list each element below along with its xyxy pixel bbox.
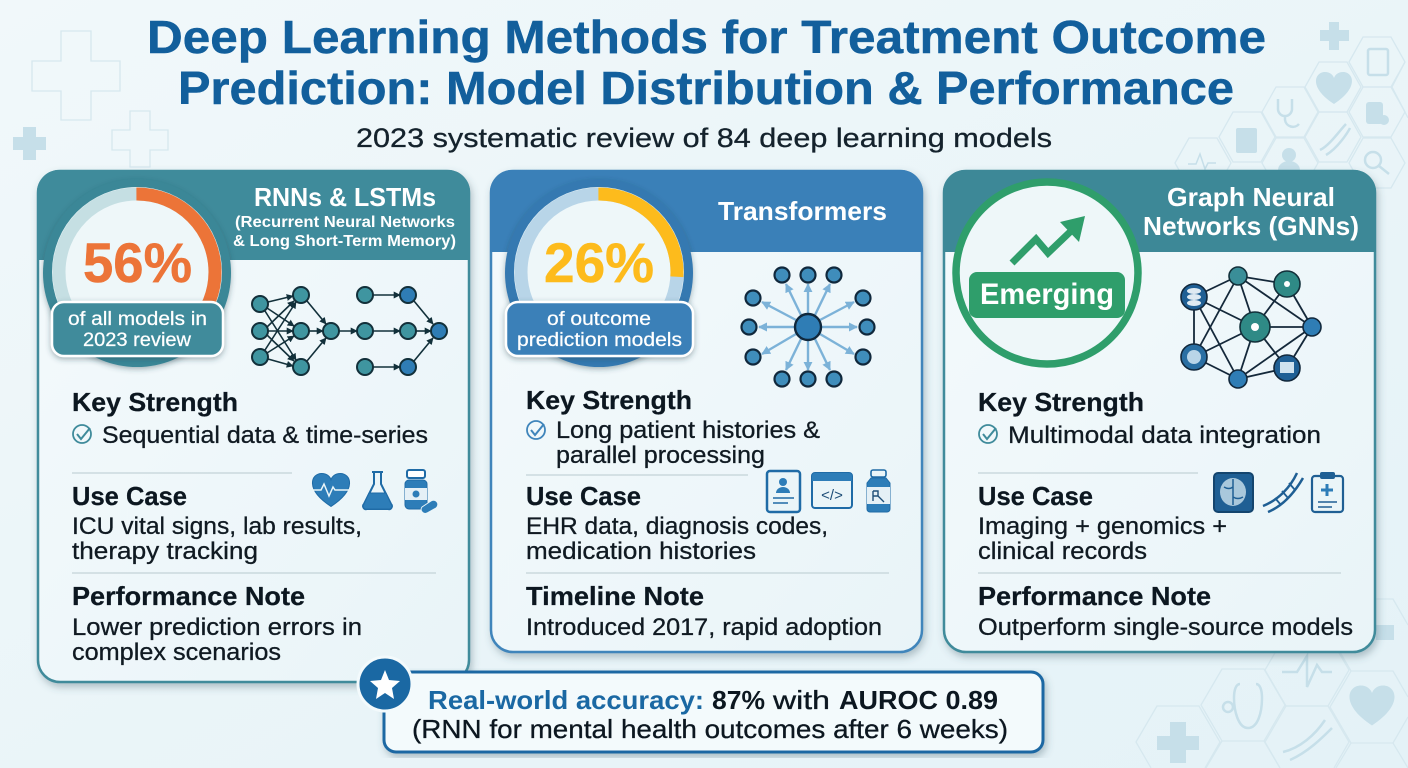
header: RNNs and LSTMs: & Long Short-Term Memory) (233, 233, 456, 250)
key strength (978, 387, 1321, 449)
title: Deep Learning Methods for Treatment Outcome (147, 11, 1266, 63)
performance note (978, 581, 1353, 641)
stat badge: Emerging (956, 182, 1138, 364)
header: Transformers (490, 170, 923, 252)
icon: heart (309, 473, 352, 506)
callout stat: AUROC 0.89 (839, 685, 998, 715)
diagram: graph network (1181, 267, 1321, 388)
timeline note: Timeline Note (526, 581, 704, 611)
header: RNNs and LSTMs (37, 170, 470, 260)
key strength: Sequential data & time-series (102, 422, 428, 449)
icon: clipboard (1312, 472, 1343, 512)
panel: Transformers (490, 170, 923, 652)
performance note: Performance Note (72, 581, 305, 611)
title (147, 11, 1266, 114)
stat ring: 26% (505, 179, 693, 367)
use case: therapy tracking (72, 538, 258, 565)
header: GNNs: Networks (GNNs) (1143, 211, 1359, 241)
use case: ICU vital signs, lab results, (72, 513, 362, 540)
callout line 1: Real-world accuracy: (428, 685, 704, 715)
key strength: Long patient histories & (556, 417, 820, 444)
key strength (526, 385, 820, 469)
icon: patient tablet (767, 471, 800, 512)
stat ring: 26%: of outcome (547, 309, 651, 330)
stat ring: 56% (43, 179, 231, 367)
header: RNNs and LSTMs: RNNs & LSTMs (254, 182, 436, 212)
callout stat: 87% (712, 685, 765, 715)
callout: real-world accuracy (358, 657, 1043, 752)
subtitle: 2023 systematic review of 84 deep learning models (356, 123, 1052, 153)
performance note: Lower prediction errors in (72, 614, 362, 641)
use case: clinical records (978, 538, 1147, 565)
icon: DNA helix (1263, 473, 1303, 512)
use case: Imaging + genomics + (978, 513, 1227, 540)
key strength: Key Strength (526, 385, 692, 415)
header: Transformers: Transformers (718, 196, 887, 226)
use case (72, 481, 362, 565)
performance note: Performance Note (978, 581, 1211, 611)
stat ring: 56%: of all models in (68, 309, 207, 330)
use case (526, 481, 828, 565)
timeline note (526, 581, 882, 641)
icon: flask (363, 472, 392, 509)
use case: Use Case (526, 481, 641, 511)
key strength (72, 387, 428, 449)
icon: code window: </> (821, 487, 843, 504)
performance note: Outperform single-source models (978, 614, 1353, 641)
callout stat (712, 685, 998, 715)
stat ring: 56%: 56% (83, 231, 192, 294)
panel: Graph Neural Networks (943, 170, 1376, 652)
performance note (72, 581, 362, 666)
icon: brain scan (1214, 473, 1253, 512)
icon: medicine bottle (867, 470, 890, 512)
stat ring: 26%: 26% (544, 231, 654, 294)
stat ring: 26%: prediction models (517, 330, 682, 351)
title: Prediction: Model Distribution & Performance (178, 62, 1234, 114)
icon: star badge (358, 657, 412, 711)
use case: medication histories (526, 538, 756, 565)
header: RNNs and LSTMs: (Recurrent Neural Networks (235, 214, 455, 231)
header: GNNs (943, 170, 1376, 252)
stat badge: Emerging: Emerging (980, 278, 1114, 311)
use case: Use Case (72, 481, 187, 511)
use case (978, 481, 1227, 565)
callout line 2: (RNN for mental health outcomes after 6 weeks) (412, 714, 1008, 744)
timeline note: Introduced 2017, rapid adoption (526, 614, 882, 641)
key strength: Key Strength (978, 387, 1144, 417)
icon: code window (812, 473, 852, 508)
diagram: recurrent network (252, 287, 447, 375)
key strength: Key Strength (72, 387, 238, 417)
use case: EHR data, diagnosis codes, (526, 513, 828, 540)
key strength: parallel processing (556, 442, 765, 469)
panel: RNNs and LSTMs (37, 170, 470, 682)
key strength: Multimodal data integration (1008, 422, 1321, 449)
use case: Use Case (978, 481, 1093, 511)
icon: trend arrow (1012, 216, 1085, 263)
header: GNNs: Graph Neural (1167, 182, 1335, 212)
stat ring: 56%: 2023 review (83, 330, 191, 351)
diagram: attention hub (742, 268, 874, 386)
performance note: complex scenarios (72, 639, 281, 666)
callout stat: with (772, 685, 830, 715)
icon: pill bottle (405, 470, 438, 513)
